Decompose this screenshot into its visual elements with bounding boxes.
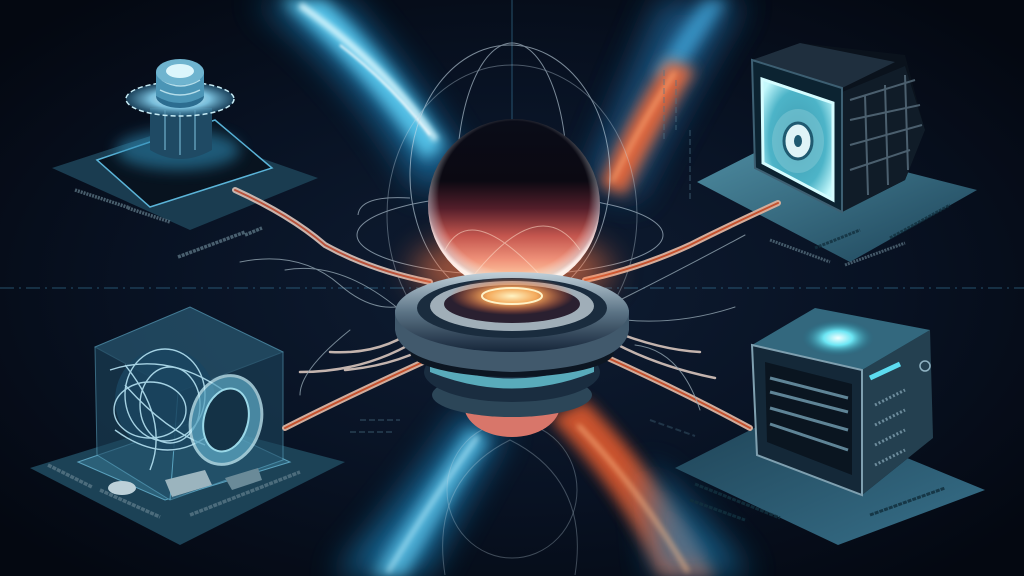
caption bars bbox=[815, 205, 950, 248]
caption bars bbox=[75, 190, 262, 257]
caption bars bbox=[48, 465, 300, 517]
connector cables bbox=[235, 190, 778, 428]
caption bars bbox=[690, 484, 945, 520]
panel: bottom-left module bbox=[30, 307, 345, 545]
icon: server cube bbox=[752, 308, 933, 495]
cable: top-right bbox=[585, 203, 778, 280]
panel: bottom-right module bbox=[675, 308, 985, 545]
faint data columns bbox=[350, 70, 695, 436]
icon: cube with display bbox=[752, 43, 925, 212]
plate bbox=[30, 420, 345, 545]
energy streak: orange upper right bbox=[585, 0, 745, 200]
grid cross lines bbox=[0, 0, 1024, 288]
cable: bottom-left bbox=[285, 352, 445, 428]
energy streak: blue lower left bbox=[335, 410, 505, 576]
icon: glowing ring machine bbox=[116, 59, 240, 170]
plate bbox=[52, 128, 318, 230]
panel: top-right module bbox=[697, 43, 977, 265]
icon: glass cube with turbine bbox=[95, 307, 283, 500]
plate bbox=[675, 410, 985, 545]
energy streak: orange lower right bbox=[550, 400, 750, 576]
thin wires bbox=[240, 235, 745, 410]
panel: top-left module bbox=[52, 59, 318, 257]
central base disc bbox=[395, 272, 629, 437]
cable: top-left bbox=[235, 190, 430, 282]
lower reflection bbox=[464, 373, 560, 437]
orbit lines around sphere bbox=[357, 43, 663, 575]
core sphere bbox=[412, 119, 612, 304]
energy streak: blue upper left bbox=[255, 0, 470, 190]
plate bbox=[697, 140, 977, 262]
cable: bottom-right bbox=[590, 350, 750, 428]
